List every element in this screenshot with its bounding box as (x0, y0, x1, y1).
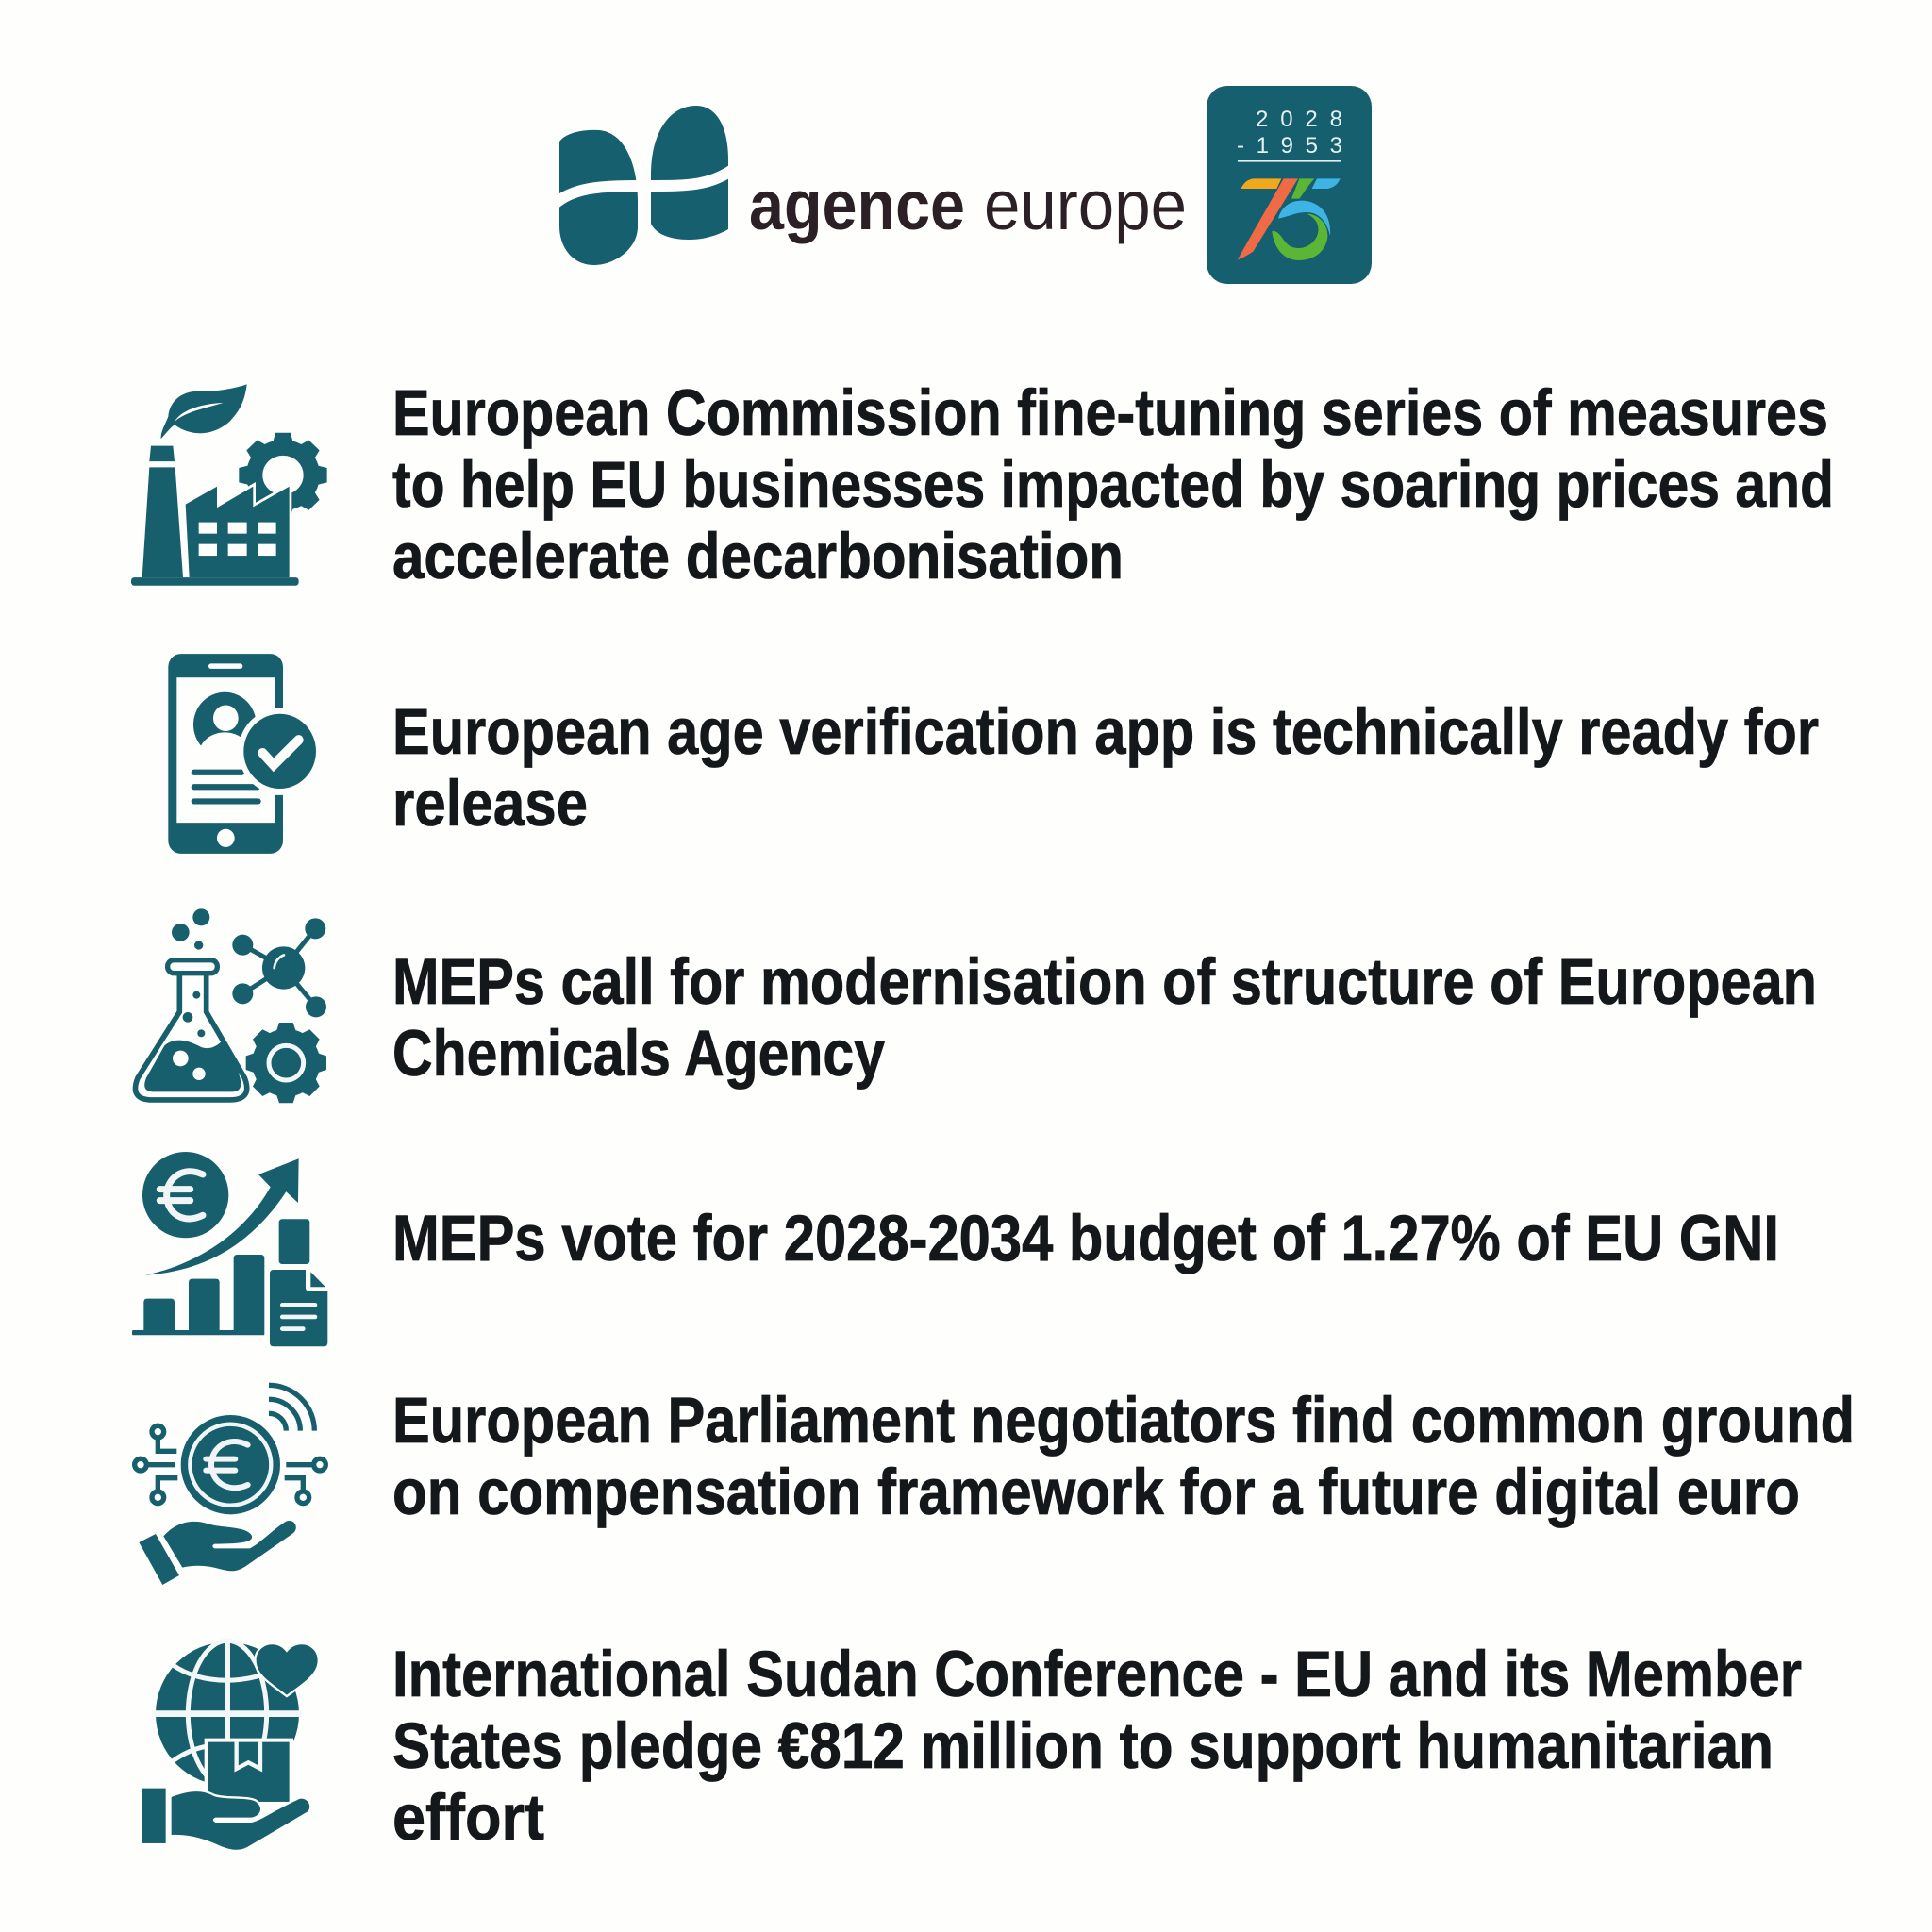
icon: flask, molecule and gear (135, 908, 326, 1103)
headline 2: release (392, 767, 588, 840)
headline 3: Chemicals Agency (392, 1017, 885, 1090)
logo mark (553, 106, 738, 265)
wordmark: europe (984, 166, 1187, 244)
logo: agence europe (553, 86, 1372, 284)
headline 6: effort (392, 1781, 544, 1854)
headline 6: States pledge €812 million to support humanitarian (392, 1709, 1774, 1782)
icon: factory with leaf and gear (131, 384, 327, 586)
headline 2 (392, 695, 1819, 840)
icon: globe, heart and aid box in hand (142, 1639, 318, 1850)
icon: digital euro coin in hand (135, 1385, 325, 1585)
headline 6 (392, 1638, 1802, 1854)
icon: euro coin, rising arrow and budget chart (132, 1152, 327, 1346)
wordmark (749, 166, 1187, 244)
headline 5 (392, 1384, 1855, 1528)
75th anniversary badge: 2 0 2 8 (1256, 107, 1342, 132)
75th anniversary badge (1207, 86, 1372, 284)
wordmark: agence (749, 166, 965, 244)
icon: phone age verification (168, 654, 322, 854)
headline 1: accelerate decarbonisation (392, 520, 1124, 592)
75th anniversary badge: - 1 9 5 3 (1237, 133, 1342, 158)
headline 1 (392, 376, 1834, 592)
headline 3 (392, 945, 1817, 1090)
